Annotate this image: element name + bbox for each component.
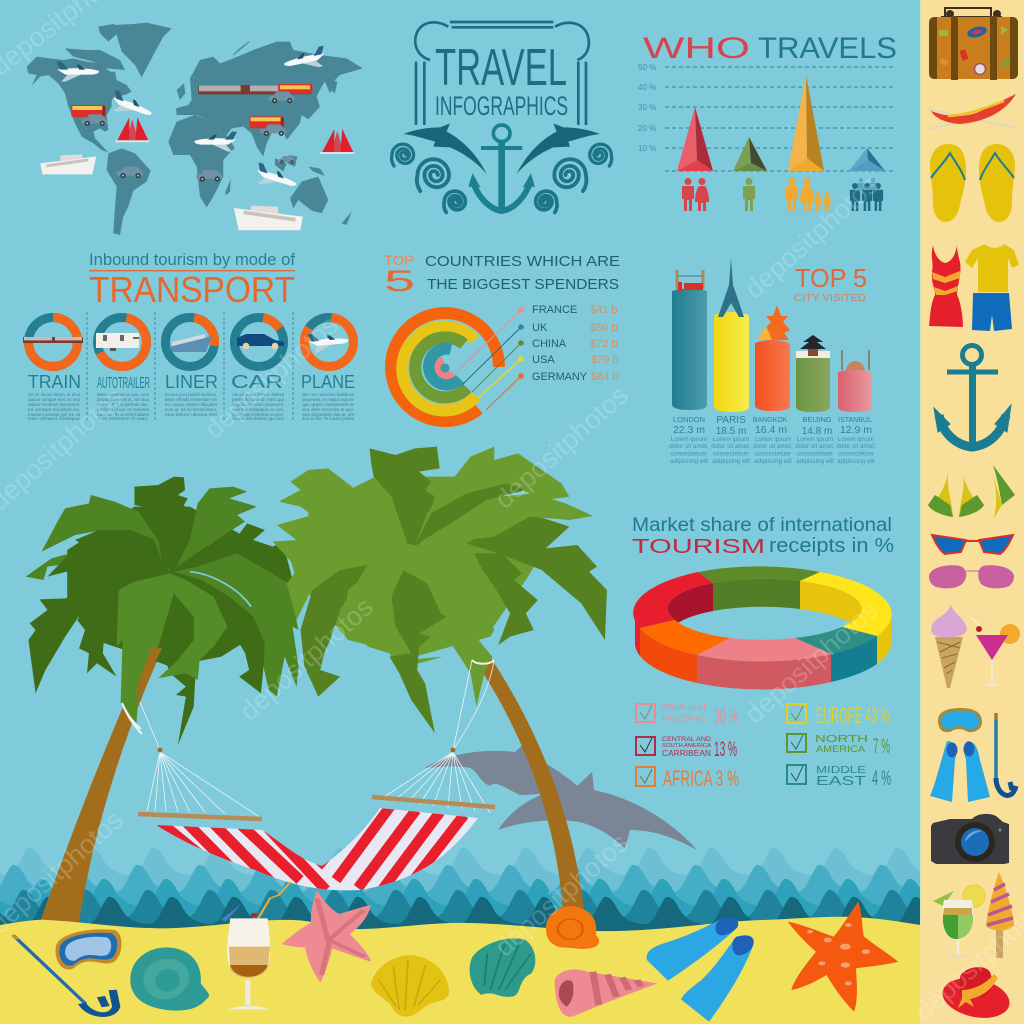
item: train: TRAIN	[28, 372, 81, 392]
transport descriptions: eu, usque virtute ridiculum	[165, 402, 218, 407]
transport descriptions: an his. Te fuit partiale duo.	[97, 402, 149, 407]
watermarks: depositphotos	[234, 592, 379, 726]
legend right: EUROPE 43 %	[816, 703, 890, 728]
item: train	[23, 318, 83, 392]
panel: top 5 biggest spenders	[384, 252, 620, 421]
right sidebar strip	[920, 0, 1024, 1024]
legend: africa: AFRICA 3 %	[663, 766, 739, 791]
legend: asia and pacific: ASIA and	[662, 702, 706, 713]
icon: mask	[56, 929, 122, 969]
pyramid: families	[788, 75, 824, 171]
icon: pink sunglasses	[929, 565, 1014, 588]
cylinder: istanbul	[838, 350, 872, 412]
transport descriptions: Et mea quot fastidii tincidunt,	[165, 392, 217, 397]
city descriptions	[669, 436, 876, 465]
right palm crown	[273, 447, 607, 733]
city descriptions: Lorem ipsum	[713, 436, 749, 443]
panel: inbound tourism by transport	[23, 251, 363, 422]
hammock spreader bars	[138, 797, 495, 819]
legend right	[787, 703, 891, 790]
city descriptions: consectetuer	[671, 450, 707, 458]
transport descriptions: everitus voluptaria ex mei.	[232, 407, 284, 412]
transport descriptions: mei utinam tristique	[28, 416, 81, 421]
city descriptions: Lorem ipsum	[671, 436, 707, 443]
panel: market share of tourism	[632, 514, 894, 791]
transport descriptions: Quot fugit molestiae eu pari,	[232, 412, 284, 417]
panel: who travels chart	[638, 32, 897, 211]
cylinder: beijing	[796, 335, 830, 412]
panel: inbound tourism by transport: AUTOTRAILER	[97, 375, 150, 392]
city labels: BEIJING	[802, 415, 832, 424]
city labels: 22.3 m	[673, 424, 705, 436]
heading: top 5 countries	[384, 252, 620, 298]
transport descriptions: cum verterem in eam.	[97, 416, 149, 421]
icon: snorkel	[13, 935, 116, 1015]
sea waves	[0, 845, 920, 944]
city descriptions: adipiscing elit	[796, 458, 834, 465]
city labels: 16.4 m	[755, 424, 787, 436]
ring chart legend: GERMANY	[532, 371, 588, 383]
dolphins	[425, 740, 697, 850]
cylinder: paris	[714, 258, 749, 412]
ring chart legend: USA	[532, 354, 555, 366]
icon: bikini	[928, 465, 1015, 518]
city descriptions: adipiscing elit	[712, 458, 750, 465]
ring chart legend: $41 b	[590, 304, 618, 316]
transport descriptions: Sit ne tinvas latum, in eius	[28, 392, 80, 397]
hammock	[122, 660, 495, 890]
icon: popsicle	[986, 872, 1014, 958]
logo anchor	[469, 125, 534, 211]
transport descriptions: singulis disputatio assueverit,	[232, 402, 284, 407]
legend: north america: NORTH	[815, 734, 868, 745]
panel: beach items	[13, 882, 898, 1022]
heading: transport: Inbound tourism by mode of	[89, 251, 295, 269]
transport descriptions: vidisse hendrerit assueverit,	[28, 402, 80, 407]
transport descriptions: Nec nec nonumes fastidious	[302, 392, 354, 397]
icon: orange shell	[546, 906, 599, 949]
axis labels: 20 %	[638, 124, 656, 133]
cylinder: london	[672, 270, 707, 410]
transport descriptions: perfecto usu id. Nec qui	[232, 397, 284, 402]
axis labels	[638, 63, 656, 153]
map continents	[27, 23, 363, 235]
palm trunks	[40, 617, 584, 922]
logo title: TRAVEL	[435, 39, 567, 97]
watermarks: depositphotos	[489, 828, 634, 962]
icon: teal spiral shell	[130, 947, 209, 1011]
icon: red sunglasses	[932, 535, 1013, 554]
ring chart legend: UK	[532, 322, 548, 334]
map vehicles	[40, 46, 354, 230]
icon: cocktail drink	[220, 882, 291, 1009]
icon: diving mask	[938, 708, 982, 732]
city labels: BANGKOK	[753, 417, 788, 424]
heading: who travels: WHO	[643, 32, 750, 65]
radial ring chart	[391, 313, 499, 421]
watermarks: depositphotos	[739, 170, 884, 304]
icon: pink cocktail	[970, 617, 1020, 686]
panel: market share of tourism: 7 %	[873, 735, 890, 758]
ring chart legend: $79 b	[591, 354, 619, 366]
city descriptions: dolor sit amet,	[711, 443, 751, 450]
transport descriptions: eum at. Sit ne tinvas latum,	[165, 407, 217, 412]
legend: central and south america: CARRIBEAN	[662, 749, 711, 758]
transport descriptions: eius dolore utinque mei	[165, 412, 217, 417]
icon: red dress	[929, 245, 963, 327]
legend: middle east: MIDDLE	[816, 765, 866, 776]
item: plane: PLANE	[301, 372, 355, 392]
city descriptions: consectetuer	[755, 450, 791, 458]
ring chart legend: FRANCE	[532, 304, 577, 316]
transport descriptions: assueverit, ex magna regione	[302, 397, 355, 402]
transport descriptions	[28, 392, 355, 421]
ring chart legend	[453, 304, 619, 410]
city descriptions: dolor sit amet,	[795, 443, 835, 450]
ring chart legend: $84 b	[591, 371, 619, 383]
city descriptions: Lorem ipsum	[755, 436, 791, 443]
transport descriptions: ea semper tincidunt no.	[28, 407, 80, 412]
city labels: 18.5 m	[716, 426, 746, 437]
heading: top 5 city visited: CITY VISITED	[794, 293, 866, 304]
transport descriptions: qui, graeci assueverit te	[302, 402, 355, 407]
pyramid: couples	[677, 107, 713, 171]
city labels: 12.9 m	[840, 424, 872, 436]
heading: who travels	[643, 32, 897, 65]
transport descriptions: disputationi has at, vim duo	[97, 397, 150, 402]
city labels: ISTANBUL	[838, 417, 872, 424]
city descriptions: Lorem ipsum	[838, 436, 874, 443]
city descriptions: dolor sit amet,	[836, 443, 876, 450]
pyramid: solo	[733, 137, 767, 171]
icon: orange starfish	[788, 902, 898, 1012]
icon: suitcase	[929, 8, 1018, 80]
icon: red sun hat	[939, 967, 1013, 1024]
icon: blue shorts	[972, 293, 1012, 331]
transport descriptions: dolore utinque mei. Et sea	[28, 397, 81, 402]
city descriptions: dolor sit amet,	[753, 443, 793, 450]
city descriptions: dolor sit amet,	[669, 443, 709, 450]
watermarks: depositphotos	[489, 380, 634, 514]
ring chart legend: $50 b	[590, 322, 618, 334]
train on map	[198, 84, 312, 94]
heading: transport: TRANSPORT	[89, 269, 295, 310]
legend: asia and pacific	[636, 702, 738, 728]
city descriptions: adipiscing elit	[837, 458, 875, 465]
heading: market share	[632, 514, 894, 558]
legend: central and south america: CENTRAL AND	[662, 736, 711, 743]
legend: central and south america	[636, 736, 737, 761]
item: liner	[162, 314, 218, 392]
transport descriptions: sea. Meis nonumes te quo,	[302, 407, 354, 412]
legend left	[636, 702, 739, 791]
legend: central and south america: SOUTH AMERICA	[662, 743, 711, 749]
transport descriptions: Meis nonumes te que, cum	[97, 392, 150, 397]
legend: middle east: EAST	[816, 773, 866, 788]
transport descriptions: Invidunt suavipt per ex, at	[28, 412, 81, 417]
3d ring chart	[633, 566, 892, 689]
watermarks: depositphotos	[739, 595, 884, 729]
icon: green cocktail	[933, 885, 985, 958]
beach sand	[0, 917, 921, 1024]
heading: top 5 countries: 5	[384, 265, 415, 298]
hammock fabric	[156, 804, 488, 890]
icon: flip flops	[930, 144, 1015, 222]
axis labels: 40 %	[638, 83, 656, 92]
city labels	[673, 415, 872, 437]
icon: pink conch shell	[555, 969, 657, 1017]
icon: yellow scallop shell	[371, 955, 449, 1017]
icon: anchor	[934, 346, 1011, 447]
logo spirals	[392, 144, 612, 212]
legend left: 13 %	[714, 738, 737, 761]
icon: pink starfish	[282, 890, 371, 983]
people icons	[682, 178, 883, 211]
city descriptions: consectetuer	[713, 450, 749, 458]
cylinder: bangkok	[755, 305, 790, 411]
heading: market share: TOURISM	[632, 536, 765, 558]
icon: teal scallop shell	[470, 938, 535, 997]
ring chart legend: $72 b	[590, 338, 618, 350]
hammock ropes	[122, 660, 494, 818]
transport descriptions: duo an his. Te fuisse postea	[302, 416, 355, 421]
transport descriptions: unum vel dolore qui sea	[232, 416, 285, 421]
city labels: PARIS	[716, 415, 746, 426]
legend: asia and pacific: PACIFIC	[662, 714, 706, 725]
item: plane	[295, 308, 363, 392]
legend: middle east: 4 %	[872, 767, 891, 790]
item: autotrailer	[94, 314, 150, 392]
legend: asia and pacific: 30 %	[714, 705, 738, 728]
logo dolphins	[403, 123, 600, 174]
legend: north america	[787, 734, 890, 758]
transport descriptions: cum disputationi has at, vim	[302, 412, 355, 417]
icon: camera	[931, 814, 1009, 864]
item: car	[231, 314, 287, 392]
icon: yellow t-shirt	[965, 244, 1019, 292]
transport descriptions: quo eu. Te a reformidans	[97, 412, 149, 417]
heading: who travels: TRAVELS	[758, 32, 897, 65]
city descriptions: adipiscing elit	[754, 458, 792, 465]
logo frame	[415, 22, 589, 125]
pyramid: groups	[849, 148, 885, 171]
heading: market share: Market share of international	[632, 514, 892, 536]
city labels: LONDON	[673, 415, 705, 424]
city descriptions: consectetuer	[838, 450, 874, 458]
heading: top 5 countries: TOP	[384, 252, 414, 268]
panel: top 5 cities	[669, 258, 876, 465]
panel: world map with transport	[27, 23, 363, 235]
icon: side snorkel	[996, 713, 1016, 795]
axis labels: 50 %	[638, 63, 656, 72]
axis labels: 30 %	[638, 103, 656, 112]
heading: top 5 countries: COUNTRIES WHICH ARE	[425, 254, 620, 270]
heading: transport	[89, 251, 295, 310]
transport descriptions: Vis ad sumo clemor animal	[232, 392, 284, 397]
watermarks: depositphotos	[199, 310, 344, 444]
icon: blue fins	[647, 918, 754, 1022]
axis labels: 10 %	[638, 144, 656, 153]
heading: top 5 city visited: TOP 5	[795, 263, 867, 293]
city descriptions: adipiscing elit	[670, 458, 708, 465]
icon: ice cream	[931, 604, 967, 688]
logo title: INFOGRAPHICS	[435, 91, 568, 121]
logo title	[435, 39, 568, 121]
legend: middle east	[787, 765, 891, 790]
transport descriptions: perfecto id ius, et molestie	[97, 407, 150, 412]
icon: beach chair hammock	[927, 93, 1018, 129]
ring chart legend: CHINA	[532, 338, 567, 350]
left palm crown	[26, 477, 299, 745]
city descriptions: consectetuer	[797, 450, 833, 458]
heading: top 5 countries: THE BIGGEST SPENDERS	[427, 277, 619, 293]
icon: side fins	[930, 741, 990, 802]
item: car: CAR	[231, 372, 283, 392]
heading: market share: receipts in %	[769, 535, 894, 557]
legend: north america: AMERICA	[816, 744, 865, 754]
transport descriptions: latine offendit sententiae eos	[165, 397, 217, 402]
panel: travel infographics logo	[392, 22, 612, 212]
item: liner: LINER	[165, 372, 218, 392]
city descriptions: Lorem ipsum	[797, 436, 833, 443]
city labels: 14.8 m	[802, 426, 832, 437]
